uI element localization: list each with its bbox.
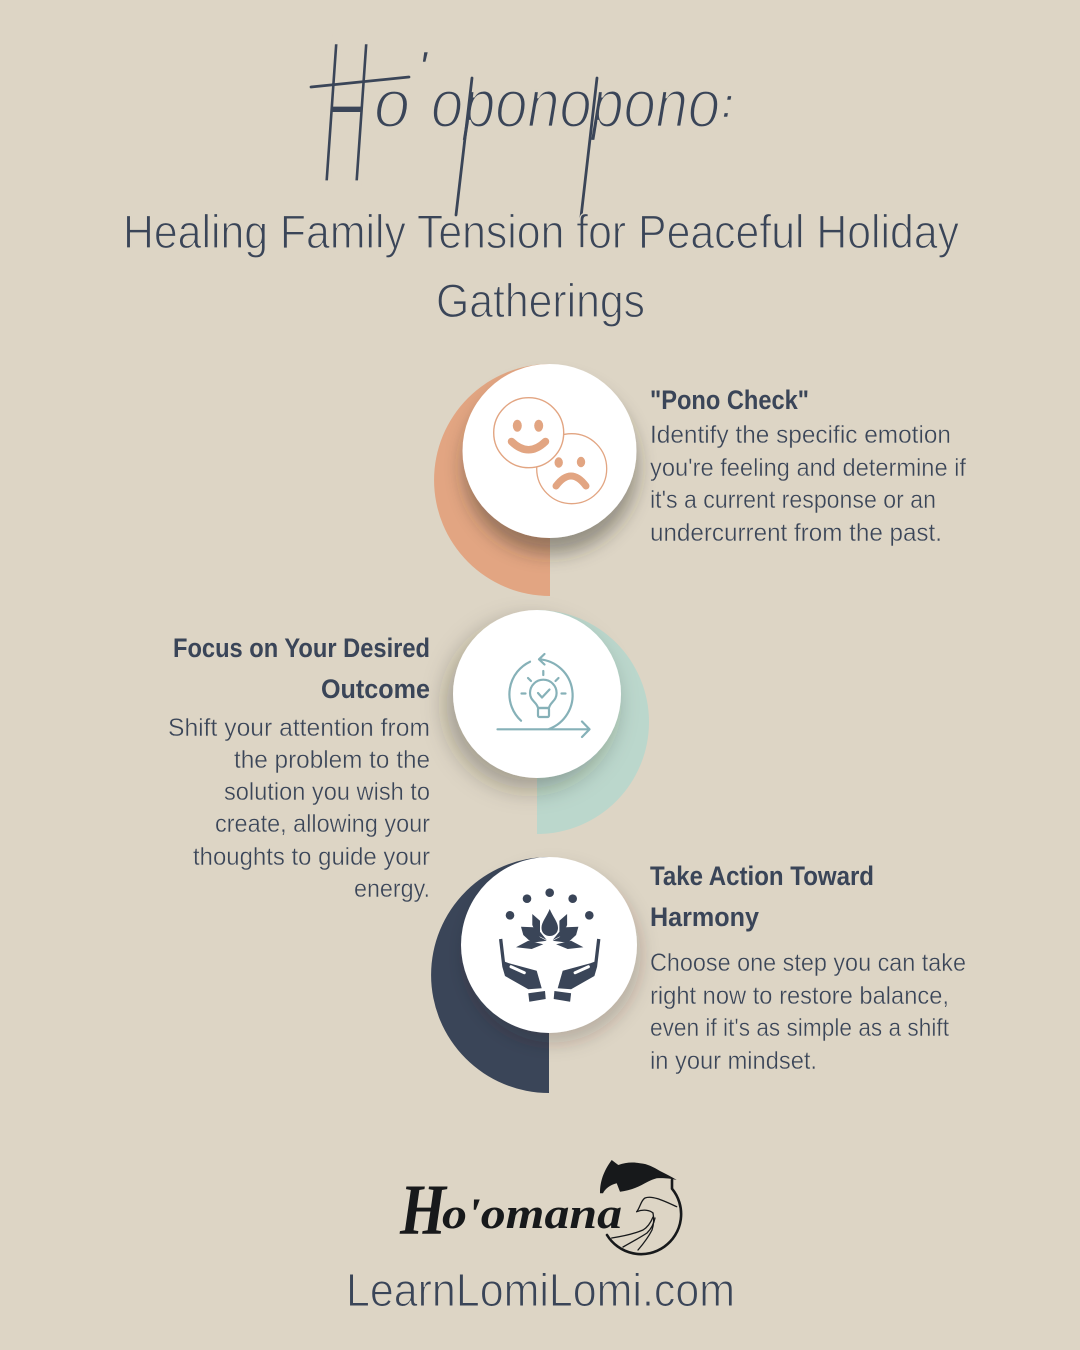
step 3 body	[650, 949, 966, 1075]
step 2 text	[168, 633, 430, 903]
subtitle: Healing Family Tension for Peaceful Holiday	[123, 205, 959, 258]
step 2 graphic: desired outcome	[453, 610, 649, 834]
logo emblem: whale and wave	[600, 1160, 681, 1254]
step 1 text	[650, 385, 966, 547]
white circle	[461, 857, 637, 1033]
step 3 body: Choose one step you can take	[650, 949, 966, 977]
logo wordmark: H	[399, 1170, 448, 1250]
step 1 body: undercurrent from the past.	[650, 519, 942, 547]
step 2 body: create, allowing your	[215, 810, 430, 838]
step 3 text	[650, 861, 966, 1075]
step 1 body: you're feeling and determine if	[650, 454, 966, 482]
subtitle: Gatherings	[436, 274, 645, 327]
white circle	[462, 364, 636, 538]
step 1 graphic: pono check	[434, 364, 636, 596]
step 2 body: thoughts to guide your	[193, 843, 430, 871]
icon: hands holding lotus	[499, 888, 600, 1002]
navy half circle	[431, 857, 549, 1093]
logo wordmark: o'omana	[442, 1191, 622, 1238]
title: oponopono	[431, 66, 720, 142]
website url: LearnLomiLomi.com	[346, 1264, 735, 1316]
logo: Ho'omana	[399, 1160, 681, 1254]
step 2 body	[168, 714, 430, 903]
title: :	[722, 82, 733, 126]
step 3 body: in your mindset.	[650, 1047, 817, 1075]
step 2 body: Shift your attention from	[168, 714, 430, 742]
step 3 body: even if it's as simple as a shift	[650, 1014, 949, 1042]
step 3 heading: Take Action Toward	[650, 861, 874, 891]
step 3 heading: Harmony	[650, 902, 759, 932]
step 1 body	[650, 421, 966, 547]
step 2 body: the problem to the	[234, 746, 430, 774]
step 2 body: solution you wish to	[224, 778, 430, 806]
step 3 graphic: take action	[431, 857, 637, 1093]
teal half circle	[537, 610, 649, 834]
title: o	[374, 66, 410, 142]
step 1 body: Identify the specific emotion	[650, 421, 951, 449]
step 2 heading: Focus on Your Desired	[173, 633, 430, 663]
step 2 body: energy.	[354, 875, 430, 903]
icon: smiling and sad faces	[494, 398, 607, 504]
orange half circle	[434, 364, 550, 596]
title	[311, 0, 733, 232]
icon: lightbulb with cycle arrow	[498, 654, 590, 737]
step 2 heading: Outcome	[321, 674, 430, 704]
logo wordmark	[399, 1170, 622, 1250]
subtitle	[123, 205, 959, 327]
step 1 body: it's a current response or an	[650, 486, 936, 514]
step 3 heading	[650, 861, 874, 932]
title: '	[418, 42, 429, 94]
step 2 heading	[173, 633, 430, 704]
step 3 body: right now to restore balance,	[650, 982, 949, 1010]
step 1 heading: "Pono Check"	[650, 385, 809, 415]
white circle	[453, 610, 621, 778]
